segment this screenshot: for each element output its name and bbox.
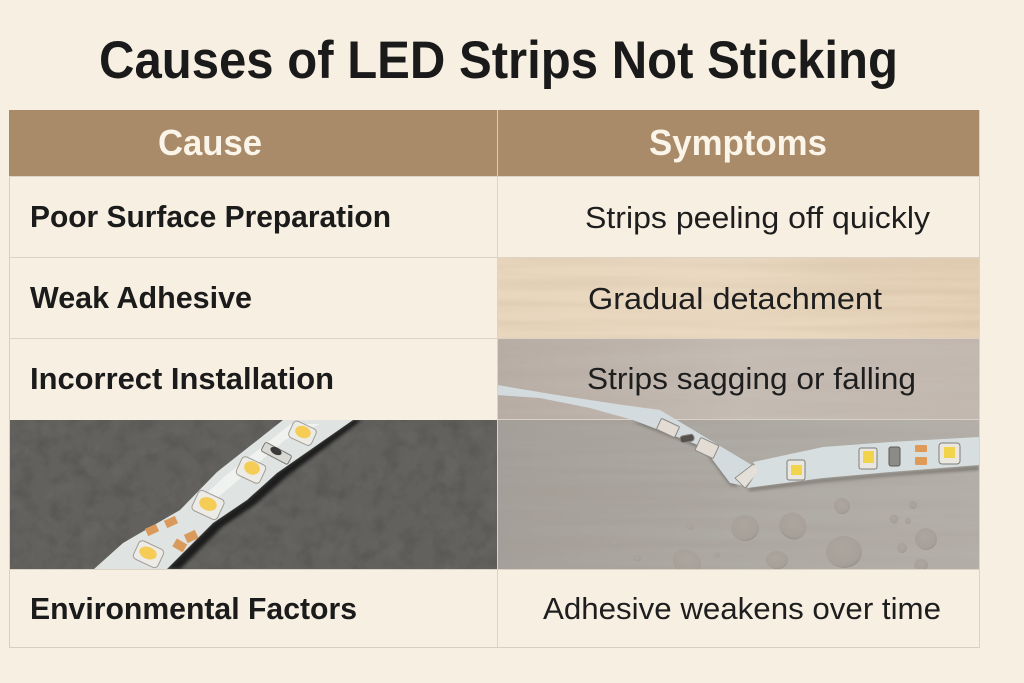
wood background cell — [498, 257, 979, 338]
row 2: weak adhesive: Weak Adhesive — [30, 280, 252, 315]
adhered strip — [747, 437, 979, 488]
table — [9, 110, 980, 648]
title: Causes of LED Strips Not Sticking — [99, 31, 898, 90]
peeling strip — [497, 385, 760, 486]
row 4: environmental factors — [30, 591, 941, 626]
strip shadow — [167, 420, 362, 569]
header row — [9, 110, 979, 176]
row 4: environmental factors: Adhesive weakens over time — [543, 591, 941, 626]
grid lines — [9, 110, 980, 647]
photo: peeling strip on metal with droplets — [497, 338, 979, 580]
row 1: poor surface preparation: Strips peeling off quickly — [585, 200, 931, 235]
row 3: incorrect installation — [30, 361, 916, 396]
chips on adhered strip — [787, 443, 960, 480]
header: cause: Cause — [158, 122, 262, 163]
row 1: poor surface preparation — [30, 199, 931, 235]
row 2: weak adhesive — [30, 280, 882, 316]
row 1: poor surface preparation: Poor Surface Preparation — [30, 199, 391, 234]
chips on peeling strip — [656, 418, 719, 459]
water droplets — [636, 498, 937, 569]
row 2: weak adhesive: Gradual detachment — [588, 281, 882, 316]
row 3: incorrect installation: Strips sagging or falling — [587, 361, 916, 396]
table body background — [10, 110, 980, 648]
row 3: incorrect installation: Incorrect Installation — [30, 361, 334, 396]
strip body — [94, 420, 353, 569]
end tab — [735, 464, 760, 488]
strip shadow — [633, 422, 738, 487]
led chips — [132, 420, 318, 569]
photo: LED strip on stone — [10, 420, 497, 569]
row 4: environmental factors: Environmental Factors — [30, 591, 357, 626]
copper pads — [145, 516, 199, 552]
header: symptoms: Symptoms — [649, 122, 827, 163]
